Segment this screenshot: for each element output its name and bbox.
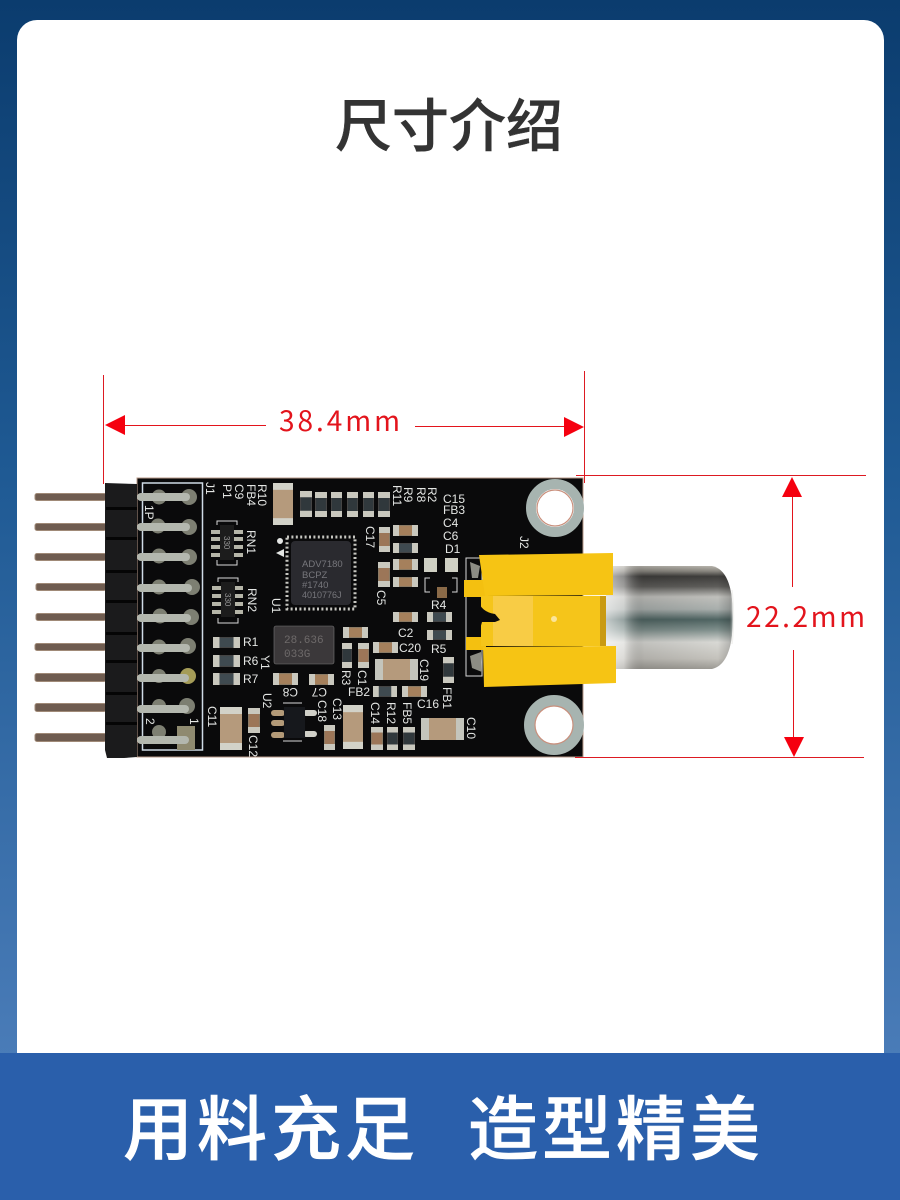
silkscreen labels: R8 xyxy=(414,487,428,503)
silkscreen labels: R3 xyxy=(339,670,353,686)
capacitors and resistors xyxy=(213,483,464,750)
width arrow left xyxy=(105,415,266,435)
silkscreen labels: FB2 xyxy=(348,685,370,699)
silkscreen labels: C6 xyxy=(443,529,459,543)
dimension: height 22.2mm xyxy=(575,476,866,758)
pin header: left pins xyxy=(35,494,106,742)
silkscreen labels: R7 xyxy=(243,672,259,686)
silkscreen labels: C14 xyxy=(368,702,382,724)
silkscreen labels: FB1 xyxy=(440,687,454,709)
silkscreen labels: C16 xyxy=(417,697,439,711)
silkscreen labels: C11 xyxy=(205,706,219,727)
main chip U1 ADV7180: BCPZ xyxy=(302,570,328,581)
silkscreen labels: C9 xyxy=(232,484,246,500)
silkscreen labels: 1 xyxy=(187,718,201,725)
silkscreen labels: FB3 xyxy=(443,503,465,517)
connector dark sliver at barrel xyxy=(600,596,606,646)
banner slogan right: 造型精美 xyxy=(468,1091,764,1169)
silkscreen labels: C10 xyxy=(464,717,478,739)
main chip U1 ADV7180: 4010776J xyxy=(302,590,342,600)
silkscreen labels: C2 xyxy=(398,626,414,640)
banner background xyxy=(0,1053,900,1200)
pin-1 marker xyxy=(276,538,284,557)
banner slogan left: 用料充足 xyxy=(123,1091,419,1169)
silkscreen labels: C13 xyxy=(330,698,344,720)
silkscreen labels: 1P xyxy=(142,505,156,520)
width label: 38.4mm xyxy=(279,400,400,440)
silkscreen labels: R4 xyxy=(431,598,447,612)
silkscreen labels: U1 xyxy=(269,598,283,614)
main chip U1 ADV7180: #1740 xyxy=(302,580,328,591)
resistor network RN1: 330 xyxy=(222,536,231,550)
silkscreen labels: C19 xyxy=(417,659,431,681)
connector lower block xyxy=(483,646,616,687)
resistor network RN1 xyxy=(211,521,243,565)
silkscreen labels: R9 xyxy=(401,487,415,503)
silkscreen labels: R5 xyxy=(431,642,447,656)
mounting washer top xyxy=(531,484,579,532)
silkscreen labels: C15 xyxy=(443,492,465,506)
silkscreen labels: R10 xyxy=(255,484,269,506)
silkscreen labels: P1 xyxy=(220,484,234,499)
header ridges xyxy=(106,507,137,725)
silkscreen labels: RN1 xyxy=(244,530,258,554)
height arrow down xyxy=(784,650,804,757)
resistor network RN2: 330 xyxy=(223,593,232,607)
yellow RCA connector housing xyxy=(464,553,616,687)
silkscreen labels: J1 xyxy=(203,482,217,495)
metal barrel of RCA jack xyxy=(606,566,734,669)
crystal Y1 xyxy=(274,626,334,664)
silkscreen labels: R11 xyxy=(390,485,404,506)
height arrow up xyxy=(782,477,802,587)
silkscreen labels: C18 xyxy=(315,700,329,722)
height extension lines xyxy=(575,476,866,758)
resistor network RN2 xyxy=(212,578,243,623)
crystal Y1: 28.636 xyxy=(284,635,324,647)
bottom banner xyxy=(0,1053,900,1200)
width extension lines xyxy=(104,371,584,484)
solder pads xyxy=(150,489,200,750)
pin header: black housing xyxy=(105,483,137,758)
silkscreen labels xyxy=(142,482,531,757)
silkscreen labels: R2 xyxy=(425,487,439,503)
silkscreen labels: RN2 xyxy=(245,588,259,612)
silkscreen labels: R12 xyxy=(384,702,398,724)
regulator U2 xyxy=(271,703,317,741)
silkscreen labels: FB5 xyxy=(400,702,414,724)
indicator LED D1 xyxy=(424,558,458,598)
connector upper block xyxy=(479,553,613,596)
silkscreen labels: 2 xyxy=(143,718,157,725)
product photo: video decoder module xyxy=(35,478,734,758)
silkscreen labels: C5 xyxy=(374,590,388,606)
connector middle section xyxy=(481,596,600,646)
silkscreen labels: Y1 xyxy=(258,655,272,670)
silkscreen labels: R6 xyxy=(243,654,259,668)
silkscreen labels: C12 xyxy=(246,735,260,757)
connector left tabs xyxy=(464,580,486,650)
silkscreen labels: U2 xyxy=(260,693,274,709)
connector socket slot xyxy=(466,558,482,676)
silkscreen labels: C8 xyxy=(282,685,298,699)
silkscreen labels: C4 xyxy=(443,516,459,530)
main chip U1 ADV7180: ADV7180 xyxy=(302,559,343,570)
silkscreen labels: C1 xyxy=(355,670,369,686)
connector solder legs xyxy=(470,562,482,672)
main chip U1 ADV7180 xyxy=(287,537,355,609)
mounting washer bottom xyxy=(530,700,578,750)
connector notch xyxy=(468,600,500,636)
height label: 22.2mm xyxy=(746,596,865,636)
width arrow right xyxy=(415,417,584,437)
silkscreen labels: C20 xyxy=(399,641,421,655)
bent pins xyxy=(137,493,192,744)
title: 尺寸介绍 xyxy=(335,95,563,159)
silkscreen labels: J2 xyxy=(517,536,531,549)
silkscreen labels: D1 xyxy=(445,542,461,556)
connector inner recess xyxy=(493,596,533,646)
circuit board xyxy=(137,478,583,757)
silkscreen connector outline xyxy=(142,483,202,750)
silkscreen labels: FB4 xyxy=(244,484,258,506)
dimension: width 38.4mm xyxy=(104,371,584,484)
silkscreen labels: C7 xyxy=(311,685,327,699)
silkscreen labels: C17 xyxy=(363,526,377,548)
crystal Y1: 033G xyxy=(284,649,310,661)
silkscreen labels: R1 xyxy=(243,635,259,649)
connector sheen dot xyxy=(551,616,557,622)
